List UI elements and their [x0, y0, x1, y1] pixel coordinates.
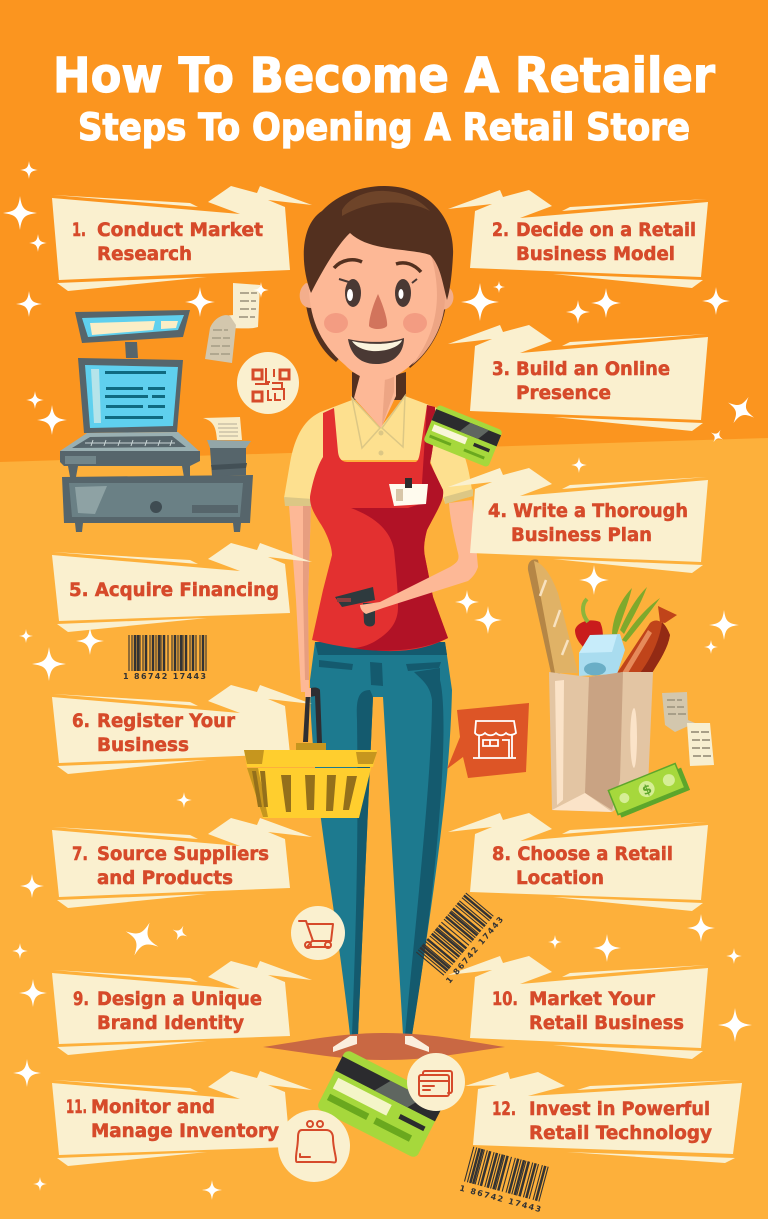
- step 8: 8. Choose a Retail: [492, 843, 673, 865]
- left arm: [289, 505, 311, 692]
- icon: cash: [608, 762, 690, 818]
- step 8: Location: [516, 867, 604, 889]
- step 1: Research: [97, 243, 192, 265]
- step 11: [52, 1071, 312, 1166]
- step 1: [52, 186, 312, 291]
- step 3: 3.: [492, 358, 510, 380]
- icon: store callout: [447, 703, 529, 778]
- pepper: [575, 620, 603, 650]
- step 6: Business: [97, 734, 189, 756]
- smile: [348, 338, 404, 364]
- icon: grocery bag: [528, 559, 677, 812]
- step 9: Design a Unique: [97, 988, 262, 1010]
- icon: QR code badge: [237, 352, 299, 414]
- illustration: cash register: [60, 310, 253, 532]
- barcode scanner: [335, 587, 375, 626]
- step 1: 1.: [72, 219, 86, 241]
- step 7: [52, 818, 312, 908]
- step 4: Business Plan: [511, 524, 652, 546]
- shoes and shadow: [263, 1033, 505, 1060]
- jeans: [310, 642, 452, 1035]
- ears: [300, 283, 453, 310]
- icon: shopping cart badge: [291, 906, 345, 960]
- eyes: [345, 279, 361, 307]
- step 10: 10.: [492, 988, 518, 1010]
- apron shadow: [351, 405, 448, 651]
- step 6: 6.: [72, 710, 90, 732]
- milk carton: [579, 634, 625, 676]
- subtitle: Steps To Opening A Retail Store: [78, 106, 690, 149]
- icon: credit card on shoulder: [423, 404, 503, 468]
- step 9: 9.: [73, 988, 89, 1010]
- figure: woman shopkeeper: [263, 186, 505, 1060]
- step 12: [465, 1072, 742, 1163]
- step 7: and Products: [97, 867, 233, 889]
- brows: [334, 260, 421, 272]
- barcode middle: [414, 890, 505, 985]
- sausage: [617, 621, 670, 673]
- icon: cards badge: [407, 1053, 465, 1111]
- icon: receipt right of bag: [662, 692, 714, 766]
- step 11: 11.: [66, 1096, 87, 1118]
- step 7: 7.: [72, 843, 88, 865]
- step 5: 5. Acquire Financing: [69, 579, 279, 601]
- step 11: Manage Inventory: [91, 1120, 280, 1142]
- green onions: [612, 587, 660, 642]
- icon: floating receipt: [205, 283, 260, 363]
- step 7: Source Suppliers: [97, 843, 269, 865]
- step 10: Market Your: [529, 988, 656, 1010]
- title: How To Become A Retailer: [53, 48, 715, 104]
- step 12: Retail Technology: [529, 1122, 713, 1144]
- right sleeve cuff: [444, 489, 473, 504]
- right arm and hand: [360, 500, 478, 614]
- barcode bottom: [458, 1146, 552, 1214]
- icon: large credit card: [316, 1049, 446, 1159]
- step 10: Retail Business: [529, 1012, 684, 1034]
- icon: shopping basket: [244, 688, 377, 818]
- apron: [310, 405, 448, 651]
- step 2: Decide on a Retail: [516, 219, 696, 241]
- step 3: Build an Online: [516, 358, 670, 380]
- step 9: Brand Identity: [97, 1012, 245, 1034]
- step 5: [52, 543, 312, 632]
- step 2: [448, 190, 708, 288]
- barcode left: [123, 635, 206, 681]
- step 3: Presence: [516, 382, 611, 404]
- cheeks: [324, 313, 348, 333]
- step 6: Register Your: [97, 710, 236, 732]
- step 6: [52, 685, 312, 774]
- face: [309, 225, 444, 380]
- barcode bottom: 1 86742 17443: [458, 1184, 542, 1214]
- neck: [354, 368, 396, 428]
- step 11: Monitor and: [91, 1096, 215, 1118]
- step 9: [52, 961, 312, 1055]
- step 3: [448, 325, 708, 431]
- step 2: Business Model: [516, 243, 675, 265]
- step 4: [448, 468, 708, 573]
- step 12: Invest in Powerful: [529, 1098, 710, 1120]
- name badge: [389, 484, 428, 506]
- barcode middle: 1 86742 17443: [444, 915, 505, 985]
- step 4: 4. Write a Thorough: [488, 500, 688, 522]
- barcode left: 1 86742 17443: [123, 672, 206, 681]
- nose: [369, 294, 387, 329]
- bag: [549, 672, 653, 812]
- hair behind: [306, 305, 446, 400]
- step 1: Conduct Market: [97, 219, 263, 241]
- shirt: [284, 396, 473, 505]
- step 10: [448, 956, 708, 1059]
- step 12: 12.: [492, 1098, 516, 1120]
- icon: coin purse badge: [278, 1110, 350, 1182]
- step 8: [448, 813, 708, 911]
- collar: [352, 396, 405, 448]
- icon: cash: $: [640, 782, 654, 799]
- step 2: 2.: [492, 219, 509, 241]
- baguette: [528, 559, 560, 675]
- hair: [304, 186, 453, 300]
